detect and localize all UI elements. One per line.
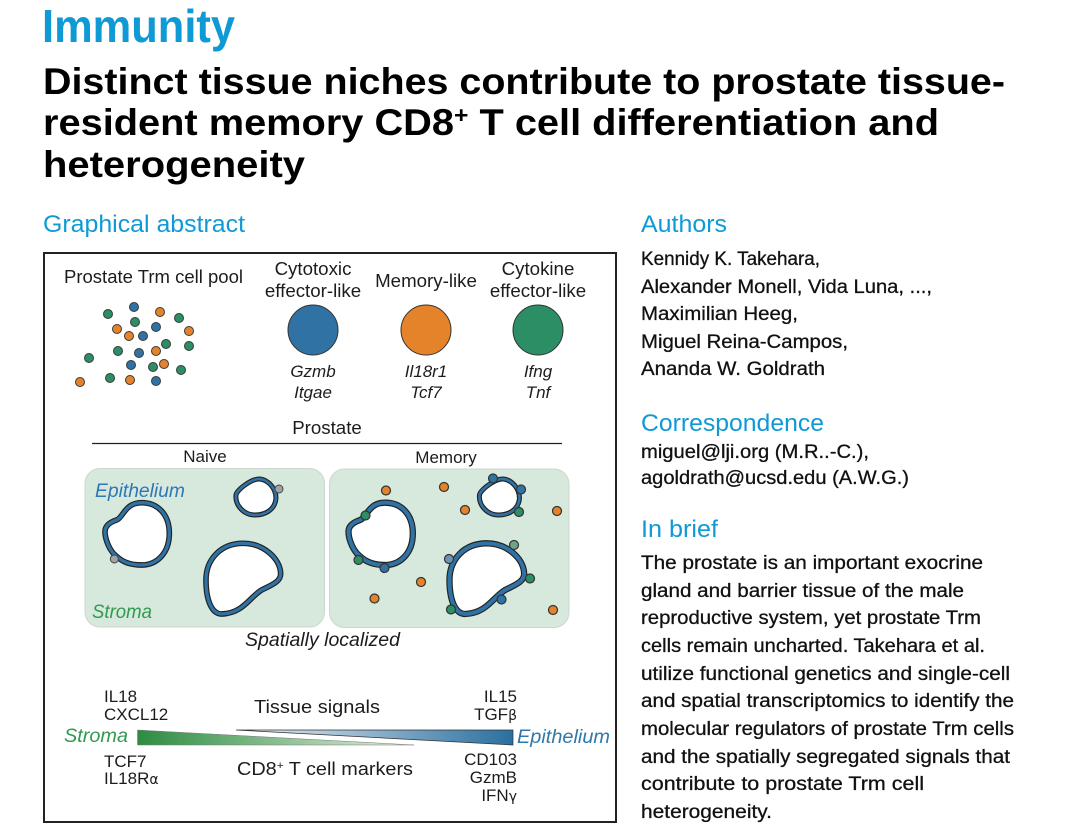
text: in brief: gland and barrier tissue of the male [641, 580, 964, 602]
text: in brief: The prostate is an important exocrine [641, 552, 983, 574]
label: memory: Memory [415, 448, 477, 467]
title: heterogeneity [43, 144, 305, 185]
text: in brief: contribute to prostate Trm cell [641, 773, 924, 795]
heading: graphical abstract: Graphical abstract [43, 211, 245, 238]
panel: graphical abstract [44, 253, 616, 822]
text: author list: Miguel Reina-Campos, [641, 331, 848, 353]
text: in brief: and spatial transcriptomics to identify the [641, 690, 1014, 712]
title: Distinct tissue niches contribute to prostate tissue- [43, 61, 1005, 102]
heading: in brief: In brief [641, 516, 718, 543]
label: CD8 markers: + [277, 760, 284, 772]
label: epithelium: Epithelium [95, 481, 185, 502]
stroma signals: CXCL12 [104, 705, 168, 724]
cell type: cytokine: Ifng [524, 362, 553, 381]
text: in brief: cells remain uncharted. Takehara et al. [641, 635, 985, 657]
stroma markers: IL18Rα [104, 769, 159, 788]
cell type: memory: Il18r1 [405, 362, 447, 381]
epithelium markers [464, 750, 517, 805]
text: in brief [641, 552, 1014, 823]
text: author list: Maximilian Heeg, [641, 303, 798, 325]
epithelium signals: IL15 [484, 687, 517, 706]
stroma markers [104, 752, 159, 788]
epithelium signals: TGFβ [474, 705, 517, 724]
title [43, 61, 1005, 185]
text: in brief: and the spatially segregated signals that [641, 746, 1011, 768]
text: in brief: reproductive system, yet prostate Trm [641, 607, 981, 629]
epithelium signals [474, 687, 517, 724]
label: naive: Naive [183, 447, 227, 466]
cell type: cytokine [490, 258, 586, 402]
label: spatially localized: Spatially localized [245, 630, 401, 651]
text: correspondence: miguel@lji.org (M.R..-C.), [641, 441, 869, 463]
text: correspondence [641, 441, 909, 489]
label: CD8 markers: CD8 [237, 758, 274, 779]
text: author list: Kennidy K. Takehara, [641, 248, 820, 270]
label: cell pool: Prostate Trm cell pool [64, 266, 243, 287]
cell type: memory: Memory-like [375, 270, 477, 291]
cell type: cytokine: Cytokine [502, 258, 574, 279]
title: + [454, 102, 468, 128]
epithelium markers: CD103 [464, 750, 517, 769]
label: epithelium gradient: Epithelium [517, 727, 610, 748]
cell type: cytokine: effector-like [490, 280, 586, 301]
text: in brief: molecular regulators of prostate Trm cells [641, 718, 1014, 740]
cells in memory tissue [354, 474, 562, 614]
cell type: memory [375, 270, 477, 402]
label: CD8 markers: T cell markers [284, 758, 413, 779]
cell type: cytotoxic: Gzmb [290, 362, 336, 381]
stroma signals: IL18 [104, 687, 137, 706]
text: author list: Alexander Monell, Vida Luna, ..., [641, 276, 932, 298]
panel: memory tissue [330, 469, 569, 628]
heading: correspondence: Correspondence [641, 410, 824, 437]
epithelium markers: GzmB [470, 768, 517, 787]
journal name: Immunity [42, 0, 235, 52]
text: author list: Ananda W. Goldrath [641, 358, 825, 380]
label: tissue signals: Tissue signals [254, 696, 380, 717]
text: correspondence: agoldrath@ucsd.edu (A.W.G.) [641, 467, 909, 489]
gradient: stroma markers and tissue signals [138, 730, 513, 745]
glands [348, 479, 524, 614]
heading: authors: Authors [641, 211, 727, 238]
text: in brief: utilize functional genetics and single-cell [641, 663, 1010, 685]
stroma markers: TCF7 [104, 752, 146, 771]
glands [105, 479, 283, 614]
cell type: cytotoxic: Itgae [294, 383, 332, 402]
title: T cell differentiation and [468, 102, 939, 143]
chart: scattered cell dots [76, 302, 194, 386]
text: in brief: heterogeneity. [641, 801, 772, 823]
stroma signals [104, 687, 168, 724]
panel: naive tissue [85, 468, 324, 627]
cell type: cytotoxic [265, 258, 361, 402]
cell type: cytotoxic: Cytotoxic [275, 258, 351, 279]
heading: prostate: Prostate [292, 417, 362, 438]
cell type: memory: Tcf7 [410, 383, 442, 402]
cell type: cytotoxic: effector-like [265, 280, 361, 301]
label: stroma: Stroma [92, 602, 152, 623]
cell type: cytokine: Tnf [526, 383, 553, 402]
label: stroma gradient: Stroma [64, 726, 128, 747]
title: resident memory CD8 [43, 102, 425, 143]
epithelium markers: IFNγ [481, 786, 517, 805]
text: author list [641, 248, 932, 380]
